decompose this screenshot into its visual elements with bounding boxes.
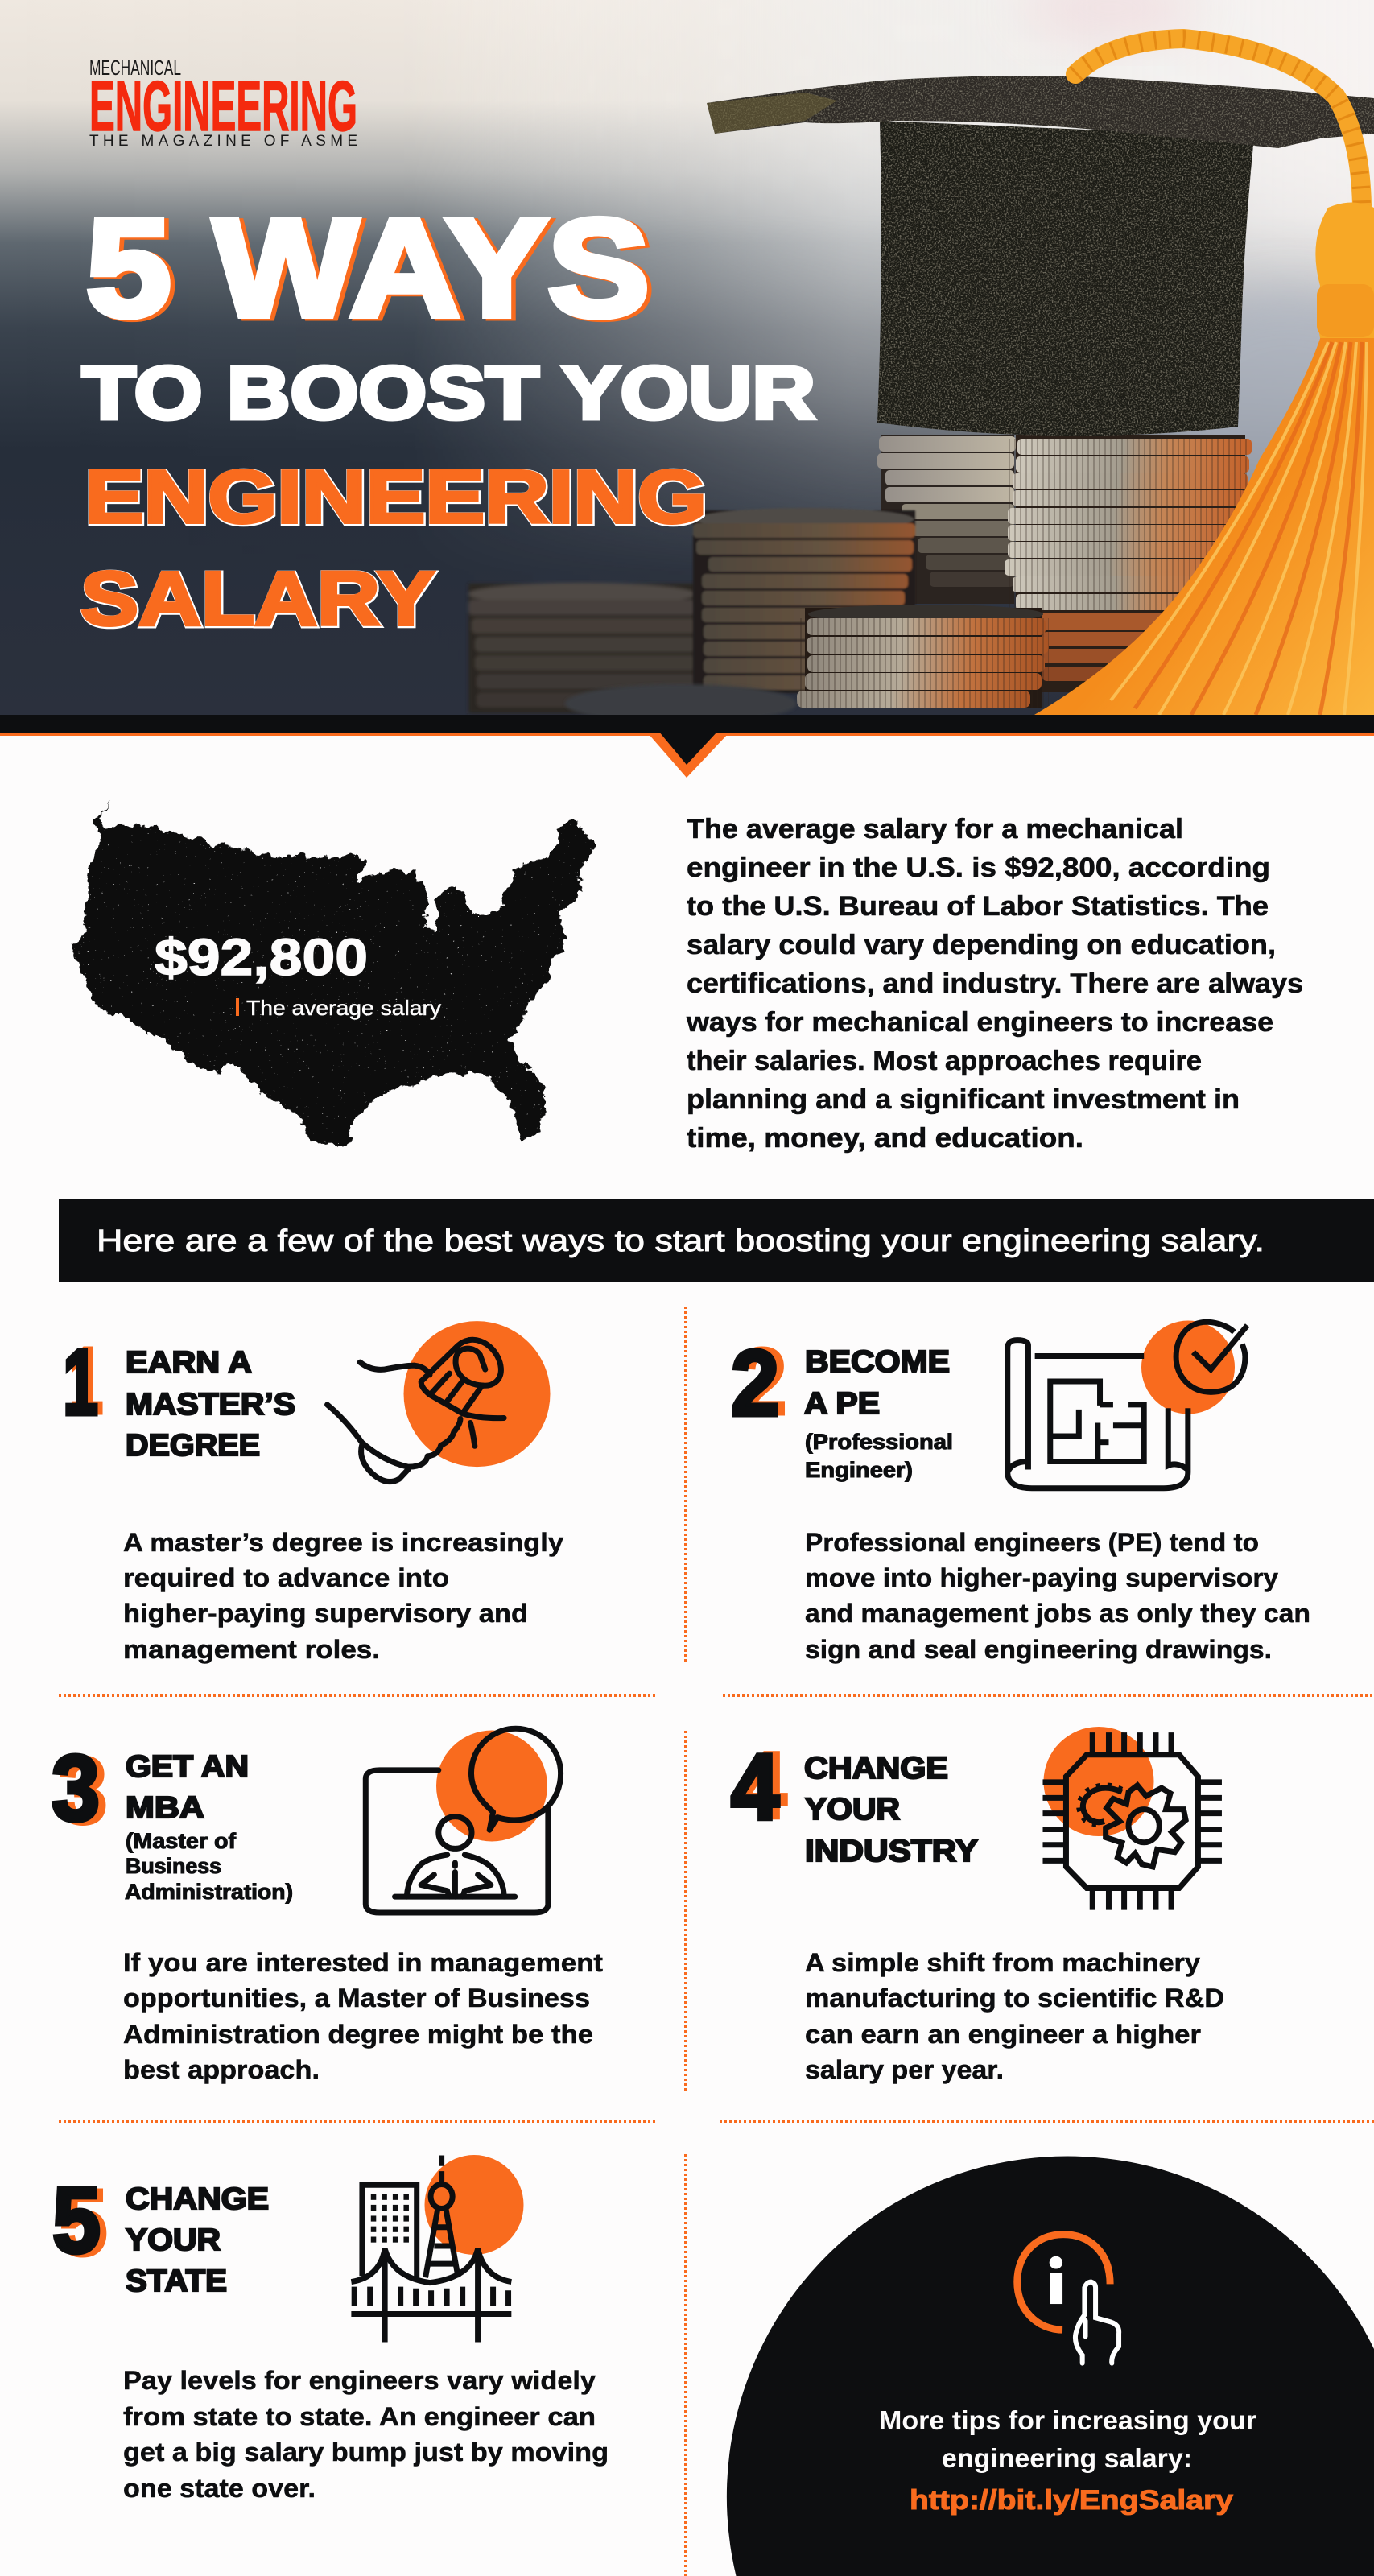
body 2: sign and seal engineering drawings. bbox=[805, 1635, 1272, 1664]
icon: info with pointing finger bbox=[1017, 2235, 1119, 2363]
heading 3: MBA bbox=[126, 1791, 204, 1825]
banner: Here are a few of the best ways to start boosting your engineering salary. bbox=[97, 1224, 1265, 1258]
black band with chevron bbox=[0, 715, 1374, 778]
number 4: 4 bbox=[738, 1733, 786, 1838]
intro paragraph: engineer in the U.S. is $92,800, according bbox=[687, 852, 1270, 883]
title line: SALARY: SALARY bbox=[80, 556, 435, 642]
tassel head bbox=[1315, 203, 1374, 338]
body 1 bbox=[123, 1528, 563, 1664]
body 3: best approach. bbox=[123, 2055, 320, 2084]
logo: Mechanical Engineering: MECHANICAL bbox=[89, 56, 181, 80]
intro paragraph: their salaries. Most approaches require bbox=[687, 1046, 1202, 1076]
bottom blurred coin bbox=[565, 684, 797, 723]
body 5 bbox=[123, 2366, 609, 2503]
intro paragraph: salary could vary depending on education, bbox=[687, 930, 1276, 960]
body 5: one state over. bbox=[123, 2474, 316, 2503]
body 4: A simple shift from machinery bbox=[805, 1948, 1200, 1977]
heading 2: A PE bbox=[804, 1387, 880, 1421]
panel 2: become a PE bbox=[731, 1320, 1310, 1664]
body 5: get a big salary bump just by moving bbox=[123, 2438, 609, 2467]
body 3 bbox=[123, 1948, 603, 2084]
cap board bbox=[707, 76, 1374, 148]
heading 3: GET AN bbox=[126, 1750, 249, 1784]
intro paragraph bbox=[686, 814, 1303, 1154]
heading 5: STATE bbox=[126, 2264, 227, 2298]
number 1: 1 bbox=[63, 1330, 98, 1435]
heading 1: EARN A bbox=[126, 1346, 252, 1380]
icon: diploma in hand bbox=[328, 1321, 551, 1482]
icon: city skyline and bridge bbox=[351, 2155, 523, 2343]
callout text: More tips for increasing your bbox=[879, 2405, 1256, 2435]
body 1: A master’s degree is increasingly bbox=[123, 1528, 563, 1557]
heading 3: Administration) bbox=[125, 1880, 293, 1904]
heading 4: YOUR bbox=[805, 1793, 900, 1827]
heading 2: (Professional bbox=[805, 1430, 953, 1454]
icon: blueprint with checkmark bbox=[1008, 1320, 1248, 1488]
heading 1: MASTER’S bbox=[126, 1388, 295, 1422]
salary caption marker bbox=[236, 998, 239, 1016]
number 4: 4 bbox=[731, 1735, 779, 1839]
intro paragraph: ways for mechanical engineers to increase bbox=[686, 1007, 1273, 1038]
callout text bbox=[879, 2405, 1256, 2516]
icon: chip with gears bbox=[1042, 1727, 1222, 1910]
panel 3: get an MBA bbox=[52, 1728, 603, 2084]
coin stack: middle bbox=[693, 508, 915, 693]
heading 3 bbox=[125, 1750, 293, 1904]
title line: SALARY: SALARY bbox=[81, 557, 435, 642]
logo: Mechanical Engineering bbox=[89, 56, 357, 150]
intro paragraph: planning and a significant investment in bbox=[687, 1084, 1240, 1115]
tassel rope twist bbox=[1075, 39, 1362, 205]
body 4: salary per year. bbox=[805, 2055, 1004, 2084]
tassel skirt bbox=[1034, 334, 1374, 715]
cap board underside highlight bbox=[707, 93, 837, 134]
body 1: required to advance into bbox=[123, 1563, 449, 1592]
title line: ENGINEERING: ENGINEERING bbox=[85, 455, 707, 539]
title line: 5 WAYS: 5 WAYS bbox=[90, 192, 654, 347]
heading 4: INDUSTRY bbox=[805, 1835, 978, 1868]
callout: more tips bbox=[727, 2156, 1374, 2576]
logo: Mechanical Engineering: THE MAGAZINE OF ASME bbox=[89, 133, 357, 150]
number 5: 5 bbox=[59, 2170, 107, 2275]
body 1: higher-paying supervisory and bbox=[123, 1599, 528, 1628]
number 5: 5 bbox=[52, 2168, 101, 2273]
heading 1 bbox=[126, 1346, 295, 1463]
body 2 bbox=[805, 1528, 1310, 1664]
body 5: from state to state. An engineer can bbox=[123, 2402, 596, 2431]
heading 4 bbox=[804, 1752, 978, 1868]
heading 2: Engineer) bbox=[805, 1458, 913, 1482]
body 2: and management jobs as only they can bbox=[805, 1599, 1310, 1628]
coin stack: far left blurred bbox=[468, 583, 696, 713]
heading 3: (Master of bbox=[126, 1829, 237, 1853]
panel 1: earn a master's degree bbox=[63, 1321, 563, 1664]
intro paragraph: The average salary for a mechanical bbox=[687, 814, 1183, 844]
callout text: engineering salary: bbox=[942, 2443, 1192, 2473]
body 3: If you are interested in management bbox=[123, 1948, 603, 1977]
body 5: Pay levels for engineers vary widely bbox=[123, 2366, 596, 2395]
coin stack: right tall bbox=[1005, 435, 1252, 692]
heading 2 bbox=[804, 1345, 953, 1482]
title bbox=[80, 191, 815, 642]
coin stack: front bbox=[797, 605, 1049, 708]
map silhouette bbox=[74, 800, 596, 1146]
number 2: 2 bbox=[738, 1329, 786, 1434]
tassel strands bbox=[1111, 342, 1367, 715]
body 3: opportunities, a Master of Business bbox=[123, 1984, 590, 2013]
title line: TO BOOST YOUR: TO BOOST YOUR bbox=[82, 351, 815, 435]
body 4: can earn an engineer a higher bbox=[805, 2020, 1201, 2049]
heading 3: Business bbox=[126, 1854, 221, 1878]
body 2: move into higher-paying supervisory bbox=[805, 1563, 1278, 1592]
coin stack: back left bbox=[877, 435, 1016, 604]
intro paragraph: certifications, and industry. There are always bbox=[687, 968, 1303, 999]
tassel rope bbox=[1075, 39, 1362, 205]
icon: person at desk with speech bubble bbox=[365, 1728, 561, 1913]
title line: ENGINEERING: ENGINEERING bbox=[85, 456, 708, 539]
callout text: http://bit.ly/EngSalary bbox=[910, 2485, 1233, 2516]
cap crown bbox=[877, 121, 1254, 436]
panel 4: change your industry bbox=[731, 1727, 1224, 2084]
heading 1: DEGREE bbox=[126, 1429, 260, 1463]
number 3: 3 bbox=[52, 1736, 100, 1840]
salary figure: $92,800 bbox=[155, 928, 368, 986]
number 3: 3 bbox=[59, 1738, 107, 1843]
callout circle bbox=[727, 2156, 1374, 2576]
number 1: 1 bbox=[69, 1328, 103, 1433]
body 1: management roles. bbox=[123, 1635, 380, 1664]
title line: 5 WAYS: 5 WAYS bbox=[86, 191, 650, 345]
salary caption: The average salary bbox=[246, 996, 441, 1020]
body 4 bbox=[805, 1948, 1224, 2084]
intro paragraph: time, money, and education. bbox=[687, 1123, 1083, 1154]
heading 4: CHANGE bbox=[804, 1752, 948, 1785]
heading 5: CHANGE bbox=[126, 2182, 269, 2216]
body 4: manufacturing to scientific R&D bbox=[805, 1984, 1224, 2013]
US map with average salary bbox=[74, 800, 596, 1146]
tassel knot bbox=[1317, 284, 1374, 337]
heading 2: BECOME bbox=[805, 1345, 950, 1379]
heading 5 bbox=[126, 2182, 269, 2298]
intro paragraph: to the U.S. Bureau of Labor Statistics. The bbox=[687, 891, 1269, 922]
heading 5: YOUR bbox=[126, 2223, 221, 2257]
hero photo: graduation cap on coins bbox=[0, 0, 1374, 723]
number 2: 2 bbox=[731, 1331, 779, 1435]
body 2: Professional engineers (PE) tend to bbox=[805, 1528, 1259, 1557]
logo: Mechanical Engineering: ENGINEERING bbox=[89, 66, 357, 146]
body 3: Administration degree might be the bbox=[123, 2020, 593, 2049]
panel 5: change your state bbox=[52, 2155, 609, 2503]
banner bbox=[59, 1199, 1374, 1282]
